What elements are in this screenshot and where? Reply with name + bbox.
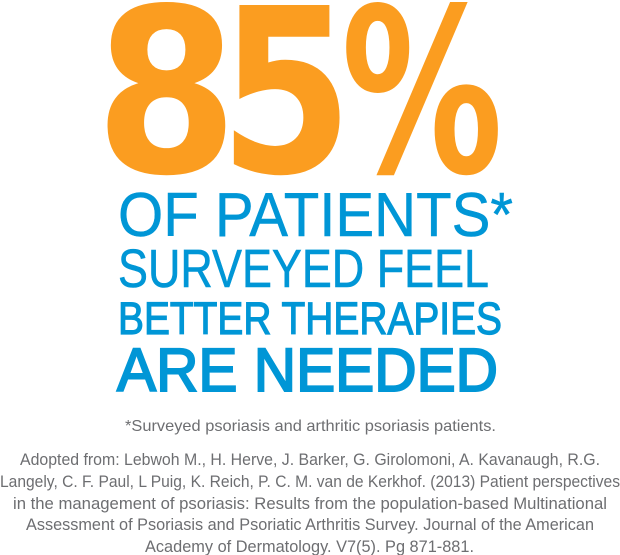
source citation: Adopted from: Lebwoh M., H. Herve, J. Barker, G. Girolomoni, A. Kavanaugh, R.G. (20, 451, 600, 469)
main message: ARE NEEDED (117, 336, 498, 404)
source citation: Assessment of Psoriasis and Psoriatic Arthritis Survey. Journal of the American (26, 516, 594, 534)
source citation (0, 451, 620, 555)
survey footnote: *Surveyed psoriasis and arthritic psoriasis patients. (125, 418, 496, 435)
main message: BETTER THERAPIES (118, 293, 502, 344)
source citation: in the management of psoriasis: Results from the population-based Multinational (13, 495, 607, 513)
main message: OF PATIENTS* (118, 181, 513, 250)
main message (117, 181, 513, 404)
headline statistic: 85% (95, 0, 503, 227)
main message: SURVEYED FEEL (118, 239, 489, 299)
